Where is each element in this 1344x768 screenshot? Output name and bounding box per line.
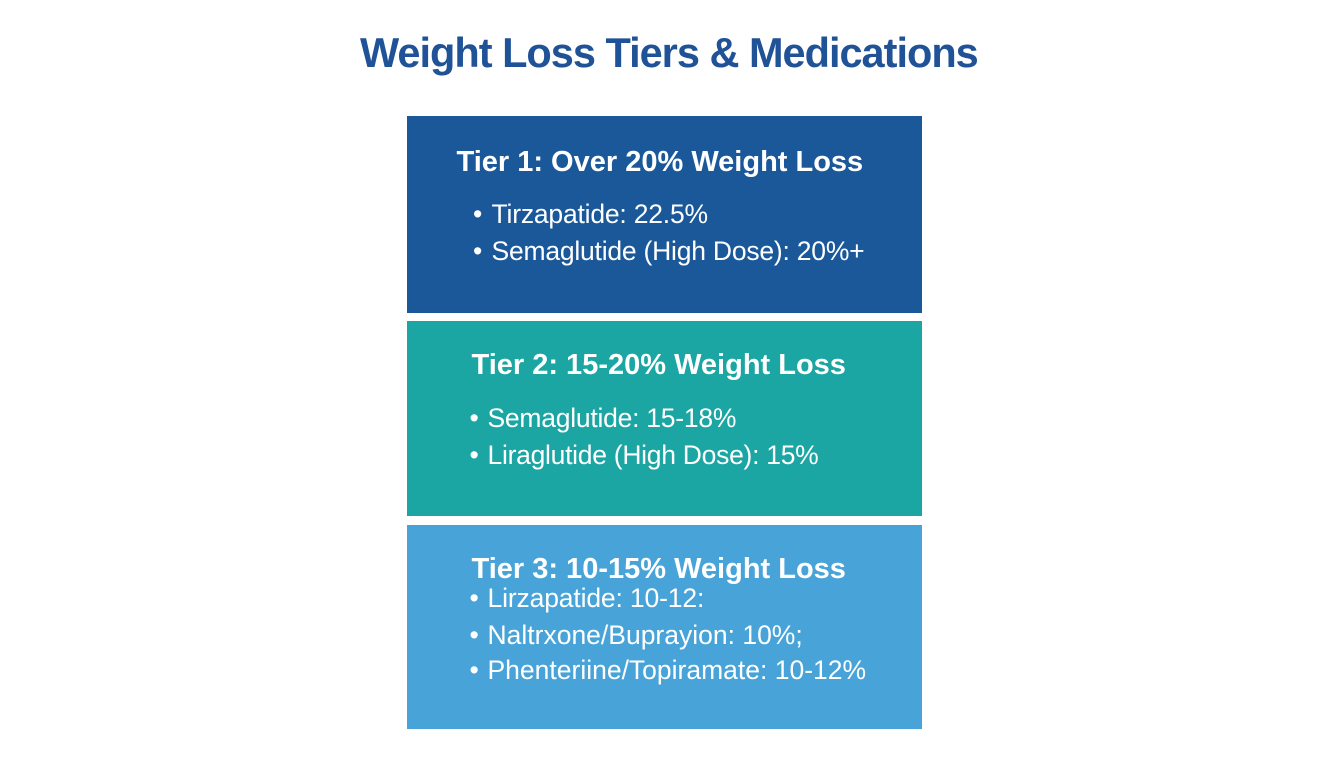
tier 1 item: tirzapatide: Tirzapatide: 22.5% bbox=[492, 199, 708, 229]
tier 2 heading: Tier 2: 15-20% Weight Loss bbox=[472, 349, 846, 381]
tier 3 heading: Tier 3: 10-15% Weight Loss bbox=[472, 553, 846, 585]
tier 2 item: semaglutide: Semaglutide: 15-18% bbox=[488, 403, 736, 433]
tier 3 item: phenteriine/topiramate: • bbox=[470, 655, 479, 685]
panel: tier 2 bbox=[407, 321, 922, 516]
panel: tier 1 bbox=[407, 116, 922, 313]
tier 3 item: naltrxone/buprayion: • bbox=[470, 620, 479, 650]
tier 3 item: lirzapatide: • bbox=[470, 583, 479, 613]
panel: tier 3 bbox=[407, 525, 922, 729]
tier 2 item: liraglutide high dose: • bbox=[470, 440, 479, 470]
tier 2 item: semaglutide: • bbox=[470, 403, 479, 433]
tier 1 item: semaglutide high dose: Semaglutide (High Dose): 20%+ bbox=[492, 236, 864, 266]
tier 2 item: liraglutide high dose: Liraglutide (High Dose): 15% bbox=[488, 440, 818, 470]
tier 1 heading: Tier 1: Over 20% Weight Loss bbox=[456, 146, 863, 178]
title: Weight Loss Tiers & Medications bbox=[360, 29, 978, 76]
tier 3 item: naltrxone/buprayion: Naltrxone/Buprayion: 10%; bbox=[488, 620, 803, 650]
tier 3 item: lirzapatide: Lirzapatide: 10-12: bbox=[488, 583, 704, 613]
tier 1 item: semaglutide high dose: • bbox=[473, 236, 482, 266]
tier 3 item: phenteriine/topiramate: Phenteriine/Topiramate: 10-12% bbox=[488, 655, 866, 685]
tier 1 item: tirzapatide: • bbox=[473, 199, 482, 229]
